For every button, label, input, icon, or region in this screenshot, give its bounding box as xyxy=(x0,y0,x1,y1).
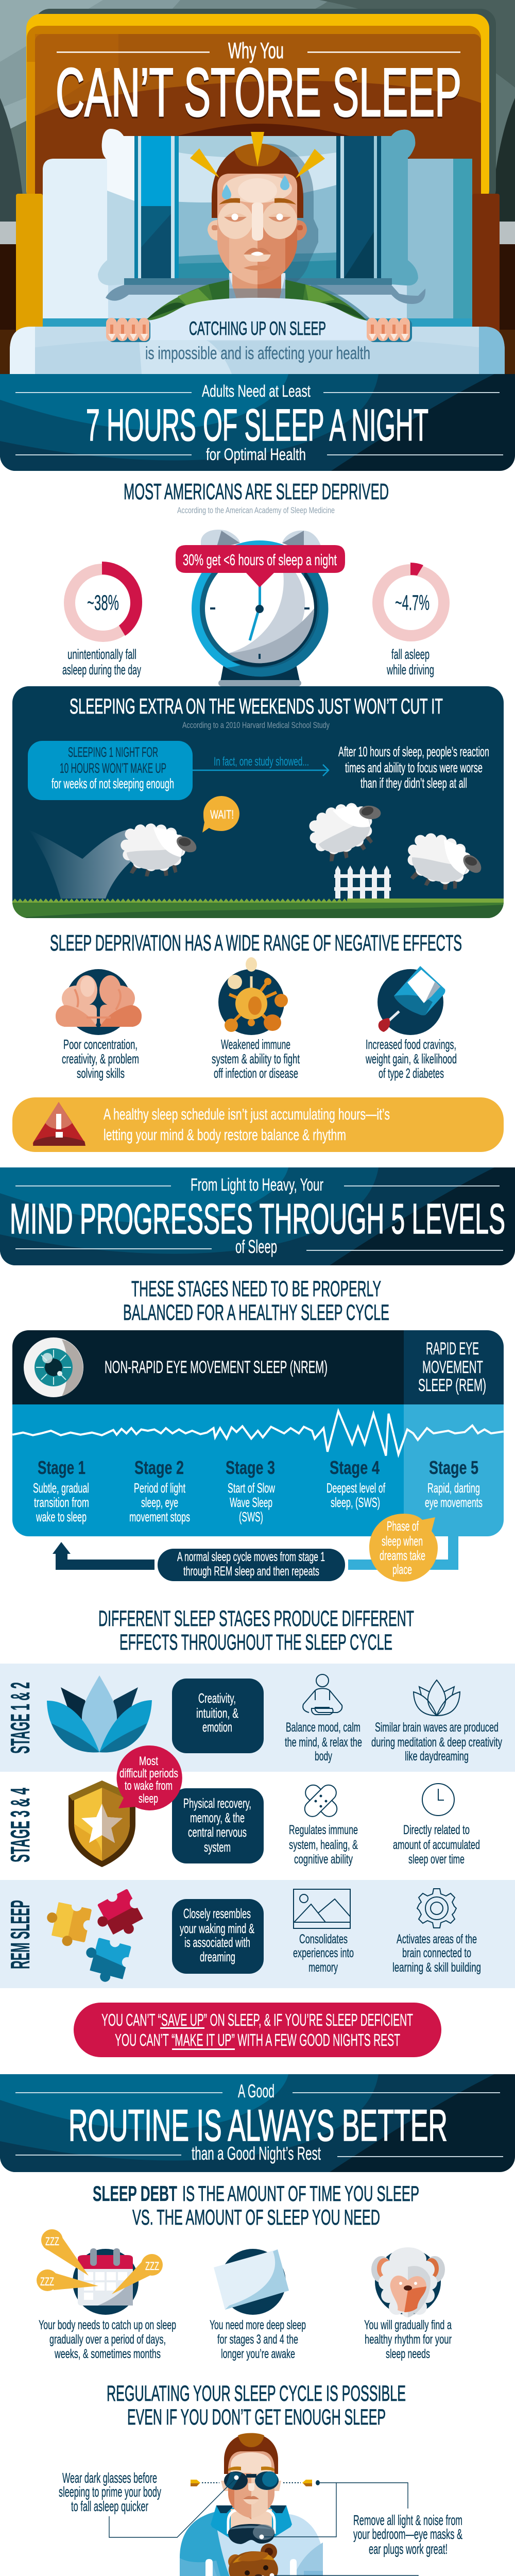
stage 5: Rapid, darting xyxy=(427,1480,480,1496)
icon: picture xyxy=(294,1889,350,1928)
light beam xyxy=(28,829,139,899)
text: consolidates: Consolidates xyxy=(299,1932,348,1946)
sunglasses xyxy=(224,2471,279,2491)
icon: pillow xyxy=(214,2249,289,2315)
bubble: dreams: Phase of xyxy=(387,1518,419,1534)
eyes and eyebrows xyxy=(219,198,296,222)
panel: sleeping extra on weekends xyxy=(12,686,504,923)
callout: healthy sleep schedule: letting your mind & body restore balance & rhythm xyxy=(104,1126,346,1144)
icon: calendar with zzz: ZZZ xyxy=(40,2275,54,2288)
panel heading: According to a 2010 Harvard Medical School Study xyxy=(182,720,330,730)
effect captions: creativity, & problem xyxy=(62,1051,139,1066)
blue callout box: SLEEPING 1 NIGHT FOR xyxy=(68,744,158,760)
pillow xyxy=(98,129,425,304)
stage 3: Stage 3 xyxy=(226,1457,275,1478)
callout: dark glasses xyxy=(59,2470,239,2537)
callout: healthy sleep schedule xyxy=(12,1097,504,1152)
callout: light and noise: ear plugs work great! xyxy=(369,2541,448,2557)
fingers holding blanket xyxy=(106,318,412,342)
caption: healthy rhythm xyxy=(364,2318,452,2361)
text: directly related: sleep over time xyxy=(408,1852,465,1867)
arrow: back to stage 1 xyxy=(53,1542,154,1570)
subtitle on blanket xyxy=(145,318,370,363)
green sweater xyxy=(147,280,372,335)
caption: body catch up: Your body needs to catch up on sleep xyxy=(39,2318,176,2332)
box: closely resembles: Closely resembles xyxy=(183,1906,251,1921)
row: REM sleep: REM SLEEP xyxy=(6,1900,36,1969)
stage 1: Stage 1 xyxy=(38,1457,85,1478)
text: regulates immune: cognitive ability xyxy=(294,1852,353,1867)
face xyxy=(217,174,297,285)
row: REM sleep xyxy=(0,1880,515,1988)
callout: can't save up xyxy=(74,2003,441,2057)
stage 3: Start of Slow xyxy=(228,1480,275,1496)
bedroom wall background xyxy=(0,0,515,222)
row: stage 3 and 4: STAGE 3 & 4 xyxy=(6,1788,36,1862)
label: NREM: NON-RAPID EYE MOVEMENT SLEEP (NREM) xyxy=(105,1358,328,1377)
clock hands xyxy=(250,582,264,640)
stage 1 xyxy=(33,1457,89,1524)
icon: bandage xyxy=(302,1782,340,1820)
heading: sleep debt: SLEEP DEBT xyxy=(93,2181,177,2206)
caption: deep sleep: You need more deep sleep xyxy=(210,2318,306,2332)
caption: body catch up: weeks, & sometimes months xyxy=(54,2347,161,2361)
icon: glucose meter and blood drop xyxy=(377,966,445,1035)
neck and collar xyxy=(228,270,286,304)
text: similar brain waves xyxy=(371,1720,502,1764)
panel heading xyxy=(70,694,443,730)
right bed post xyxy=(472,194,500,369)
bubble: dreams xyxy=(369,1514,438,1582)
banner: five levels: of Sleep xyxy=(235,1236,277,1257)
blue callout box xyxy=(28,741,193,800)
subtitle on blanket: CATCHING UP ON SLEEP xyxy=(189,318,326,339)
character: man in pajamas xyxy=(180,2433,323,2576)
banner: five levels xyxy=(0,1167,515,1265)
effect captions: of type 2 diabetes xyxy=(379,1065,444,1081)
head xyxy=(221,2433,281,2518)
subtitle on blanket: is impossible and is affecting your health xyxy=(145,344,370,363)
hair xyxy=(212,143,303,218)
effect captions: off infection or disease xyxy=(214,1065,298,1081)
effect captions: Poor concentration, xyxy=(63,1037,138,1052)
stage 2: Stage 2 xyxy=(134,1457,184,1478)
box: physical recovery xyxy=(172,1788,264,1863)
sheep: jumping up xyxy=(303,792,393,867)
alarm spikes xyxy=(190,132,325,178)
icon: calendar with zzz: ZZZ xyxy=(145,2260,159,2273)
banner: five levels: From Light to Heavy, Your xyxy=(191,1175,323,1195)
icon: calendar with zzz xyxy=(37,2229,163,2315)
callout: 30 percent: 30% get <6 hours of sleep a night xyxy=(183,551,337,569)
text: regulates immune xyxy=(289,1823,358,1867)
brain wave line xyxy=(12,1411,504,1456)
bubble: dreams: dreams take xyxy=(380,1548,425,1563)
speech bubble: wait xyxy=(202,796,239,833)
text: balance mood xyxy=(285,1720,362,1764)
bubble: dreams: sleep when xyxy=(382,1533,423,1549)
effect captions: Weakened immune xyxy=(221,1037,290,1052)
headboard xyxy=(26,9,496,211)
earplugs xyxy=(191,2480,312,2486)
stage 1: Subtle, gradual xyxy=(33,1480,89,1496)
caption: deep sleep xyxy=(210,2318,306,2361)
heading: sleep debt xyxy=(93,2181,419,2229)
stage 3: Wave Sleep xyxy=(230,1495,272,1510)
caption: deep sleep: longer you’re awake xyxy=(221,2347,295,2361)
icon: warning triangle xyxy=(33,1102,85,1146)
stage 4: sleep, (SWS) xyxy=(331,1495,380,1510)
stage 5: Stage 5 xyxy=(429,1457,478,1478)
text: directly related xyxy=(393,1823,480,1867)
stage 4 xyxy=(327,1457,385,1510)
icon: yellow puzzle piece xyxy=(42,1895,98,1951)
mouth xyxy=(244,248,271,256)
row: stage 3 and 4 xyxy=(6,1781,480,1867)
sleeve gaps xyxy=(205,2559,297,2576)
icon: gear xyxy=(417,1889,456,1928)
blanket xyxy=(10,298,505,374)
teddy bear xyxy=(228,2544,296,2576)
caption: body catch up xyxy=(39,2318,176,2361)
text: consolidates xyxy=(293,1932,354,1975)
caption: healthy rhythm: You will gradually find a xyxy=(364,2318,452,2332)
text: consolidates: experiences into xyxy=(293,1946,354,1960)
cycle arrow: light blue xyxy=(348,1533,458,1570)
stage 5 xyxy=(425,1457,483,1510)
stage 2: Period of light xyxy=(134,1480,185,1496)
box: closely resembles: dreaming xyxy=(200,1949,235,1964)
collar and neck xyxy=(211,2505,292,2543)
caption: deep sleep: for stages 3 and 4 the xyxy=(217,2332,298,2347)
bubble: most difficult periods: Most xyxy=(139,1754,158,1768)
donut chart: 38 percent: asleep during the day xyxy=(62,662,141,677)
left bed post xyxy=(16,194,43,369)
pill: normal sleep cycle: A normal sleep cycle moves from stage 1 xyxy=(177,1550,325,1564)
eye mask xyxy=(228,2524,274,2544)
row: stage 1 and 2 xyxy=(0,1664,515,1772)
text: activates: brain connected to xyxy=(402,1946,471,1960)
box: creativity xyxy=(172,1679,264,1753)
stage 1: transition from xyxy=(34,1495,89,1510)
grass xyxy=(12,899,504,918)
text: balance mood: the mind, & relax the xyxy=(285,1735,362,1750)
bubble: most difficult periods xyxy=(116,1745,182,1810)
alarm clock xyxy=(192,530,328,686)
pajama body xyxy=(180,2512,323,2576)
donut chart: 4.7 percent: while driving xyxy=(386,662,434,677)
speech bubble: wait: WAIT! xyxy=(210,808,234,822)
banner: routine: than a Good Night’s Rest xyxy=(192,2143,321,2164)
arrow xyxy=(193,755,329,776)
box: physical recovery: Physical recovery, xyxy=(183,1795,251,1811)
icon: calendar with zzz: ZZZ xyxy=(45,2235,59,2248)
callout: healthy sleep schedule: A healthy sleep schedule isn’t just accumulating hours—it’s xyxy=(104,1105,390,1123)
icon: meditating person xyxy=(303,1674,342,1715)
stage 4: Stage 4 xyxy=(330,1457,380,1478)
text: similar brain waves: like daydreaming xyxy=(405,1749,469,1764)
title: Why You xyxy=(228,38,284,63)
banner: routine: A Good xyxy=(238,2080,274,2102)
banner: 7 hours of sleep: Adults Need at Least xyxy=(202,382,311,400)
sheep: running xyxy=(117,821,201,882)
banner: routine xyxy=(0,2074,515,2172)
effect captions: weight gain, & likelihood xyxy=(365,1051,457,1066)
box: creativity: Creativity, xyxy=(198,1690,236,1706)
stage 3 xyxy=(226,1457,275,1524)
box: closely resembles xyxy=(172,1899,264,1974)
blue callout box: for weeks of not sleeping enough xyxy=(52,776,174,791)
bubble: dreams: place xyxy=(392,1562,412,1577)
icon: clock outline xyxy=(422,1784,454,1816)
bubble: most difficult periods: sleep xyxy=(139,1792,158,1806)
text: balance mood: Balance mood, calm xyxy=(286,1720,360,1735)
banner: 7 hours of sleep: for Optimal Health xyxy=(206,445,306,464)
caption: body catch up: gradually over a period of days, xyxy=(49,2332,166,2347)
stage 2: movement stops xyxy=(129,1509,190,1524)
callout: light and noise xyxy=(260,2480,462,2557)
caption: healthy rhythm: healthy rhythm for your xyxy=(365,2332,452,2347)
pill: normal sleep cycle: through REM sleep and then repeats xyxy=(183,1564,319,1579)
heading: regulating xyxy=(107,2381,406,2430)
box: creativity: emotion xyxy=(202,1719,232,1735)
icon: sheep face xyxy=(371,2247,445,2317)
heading: stages balanced xyxy=(123,1277,389,1325)
text: regulates immune: system, healing, & xyxy=(289,1838,358,1852)
bubble: most difficult periods: to wake from xyxy=(125,1779,173,1793)
stage 1: wake to sleep xyxy=(36,1509,87,1524)
effect captions xyxy=(62,1037,457,1081)
mattress xyxy=(43,159,472,327)
study result text xyxy=(338,744,489,791)
heading: most americans xyxy=(124,479,389,515)
sweat drops xyxy=(222,175,289,199)
icon: brain xyxy=(56,969,142,1035)
donut chart: 38 percent: ~38% xyxy=(87,590,119,615)
fence xyxy=(334,866,391,900)
icon: shield xyxy=(68,1781,135,1867)
effect captions: Increased food cravings, xyxy=(366,1037,456,1052)
clock bells xyxy=(201,530,322,554)
stage 2: sleep, eye xyxy=(141,1495,178,1510)
donut chart: 4.7 percent xyxy=(378,563,444,677)
clock feet and base xyxy=(218,665,301,686)
effect captions: solving skills xyxy=(77,1065,125,1081)
stage 3: (SWS) xyxy=(239,1509,263,1524)
text: activates xyxy=(392,1932,481,1975)
text: consolidates: memory xyxy=(308,1960,338,1975)
stage 4: Deepest level of xyxy=(327,1480,385,1496)
row: stage 1 and 2: STAGE 1 & 2 xyxy=(6,1682,36,1754)
arrow: In fact, one study showed... xyxy=(214,755,309,769)
icon: blue puzzle piece xyxy=(80,1930,138,1988)
icon: ears xyxy=(208,220,307,241)
text: regulates immune: Regulates immune xyxy=(289,1823,358,1837)
sheep: landing xyxy=(399,825,490,902)
icon: red puzzle piece xyxy=(88,1882,151,1945)
banner: 7 hours of sleep xyxy=(0,374,515,472)
effect captions: system & ability to fight xyxy=(212,1051,300,1066)
heading: most americans: According to the American Academy of Sleep Medicine xyxy=(177,505,335,515)
donut chart: 38 percent: unintentionally fall xyxy=(67,647,136,662)
heading: different effects xyxy=(98,1606,414,1655)
label: REM xyxy=(418,1339,486,1395)
box: physical recovery: system xyxy=(204,1839,231,1855)
callout: any help xyxy=(270,2573,465,2576)
text: directly related: Directly related to xyxy=(403,1823,470,1837)
floor strip and wood floor xyxy=(0,222,515,374)
icon: eye xyxy=(24,1337,83,1397)
panel: sleep stages chart xyxy=(12,1330,504,1536)
box: closely resembles: is associated with xyxy=(184,1935,250,1950)
blue callout box: 10 HOURS WON’T MAKE UP xyxy=(60,760,166,776)
icon: virus xyxy=(218,957,288,1035)
text: balance mood: body xyxy=(315,1749,332,1764)
bubble: most difficult periods: difficult periods xyxy=(119,1767,178,1781)
callout: dark glasses: to fall asleep quicker xyxy=(71,2498,148,2514)
icon: lotus outline xyxy=(414,1680,460,1716)
icon: lotus xyxy=(47,1675,152,1753)
box: physical recovery: central nervous xyxy=(188,1824,247,1840)
callout: 30 percent xyxy=(176,545,345,587)
donut chart: 4.7 percent: fall asleep xyxy=(391,647,430,662)
donut chart: 4.7 percent: ~4.7% xyxy=(395,590,430,615)
character: tired man in bed xyxy=(147,132,372,335)
box: physical recovery: memory, & the xyxy=(190,1810,245,1825)
stage 2 xyxy=(129,1457,190,1524)
callout: dark glasses: sleeping to prime your body xyxy=(59,2484,161,2500)
pill: normal sleep cycle xyxy=(158,1549,345,1581)
caption: healthy rhythm: sleep needs xyxy=(386,2347,430,2361)
donut chart: 38 percent xyxy=(62,562,142,677)
box: closely resembles: your waking mind & xyxy=(180,1921,254,1936)
box: creativity: intuition, & xyxy=(196,1705,238,1721)
callout: dark glasses: Wear dark glasses before xyxy=(62,2470,157,2486)
